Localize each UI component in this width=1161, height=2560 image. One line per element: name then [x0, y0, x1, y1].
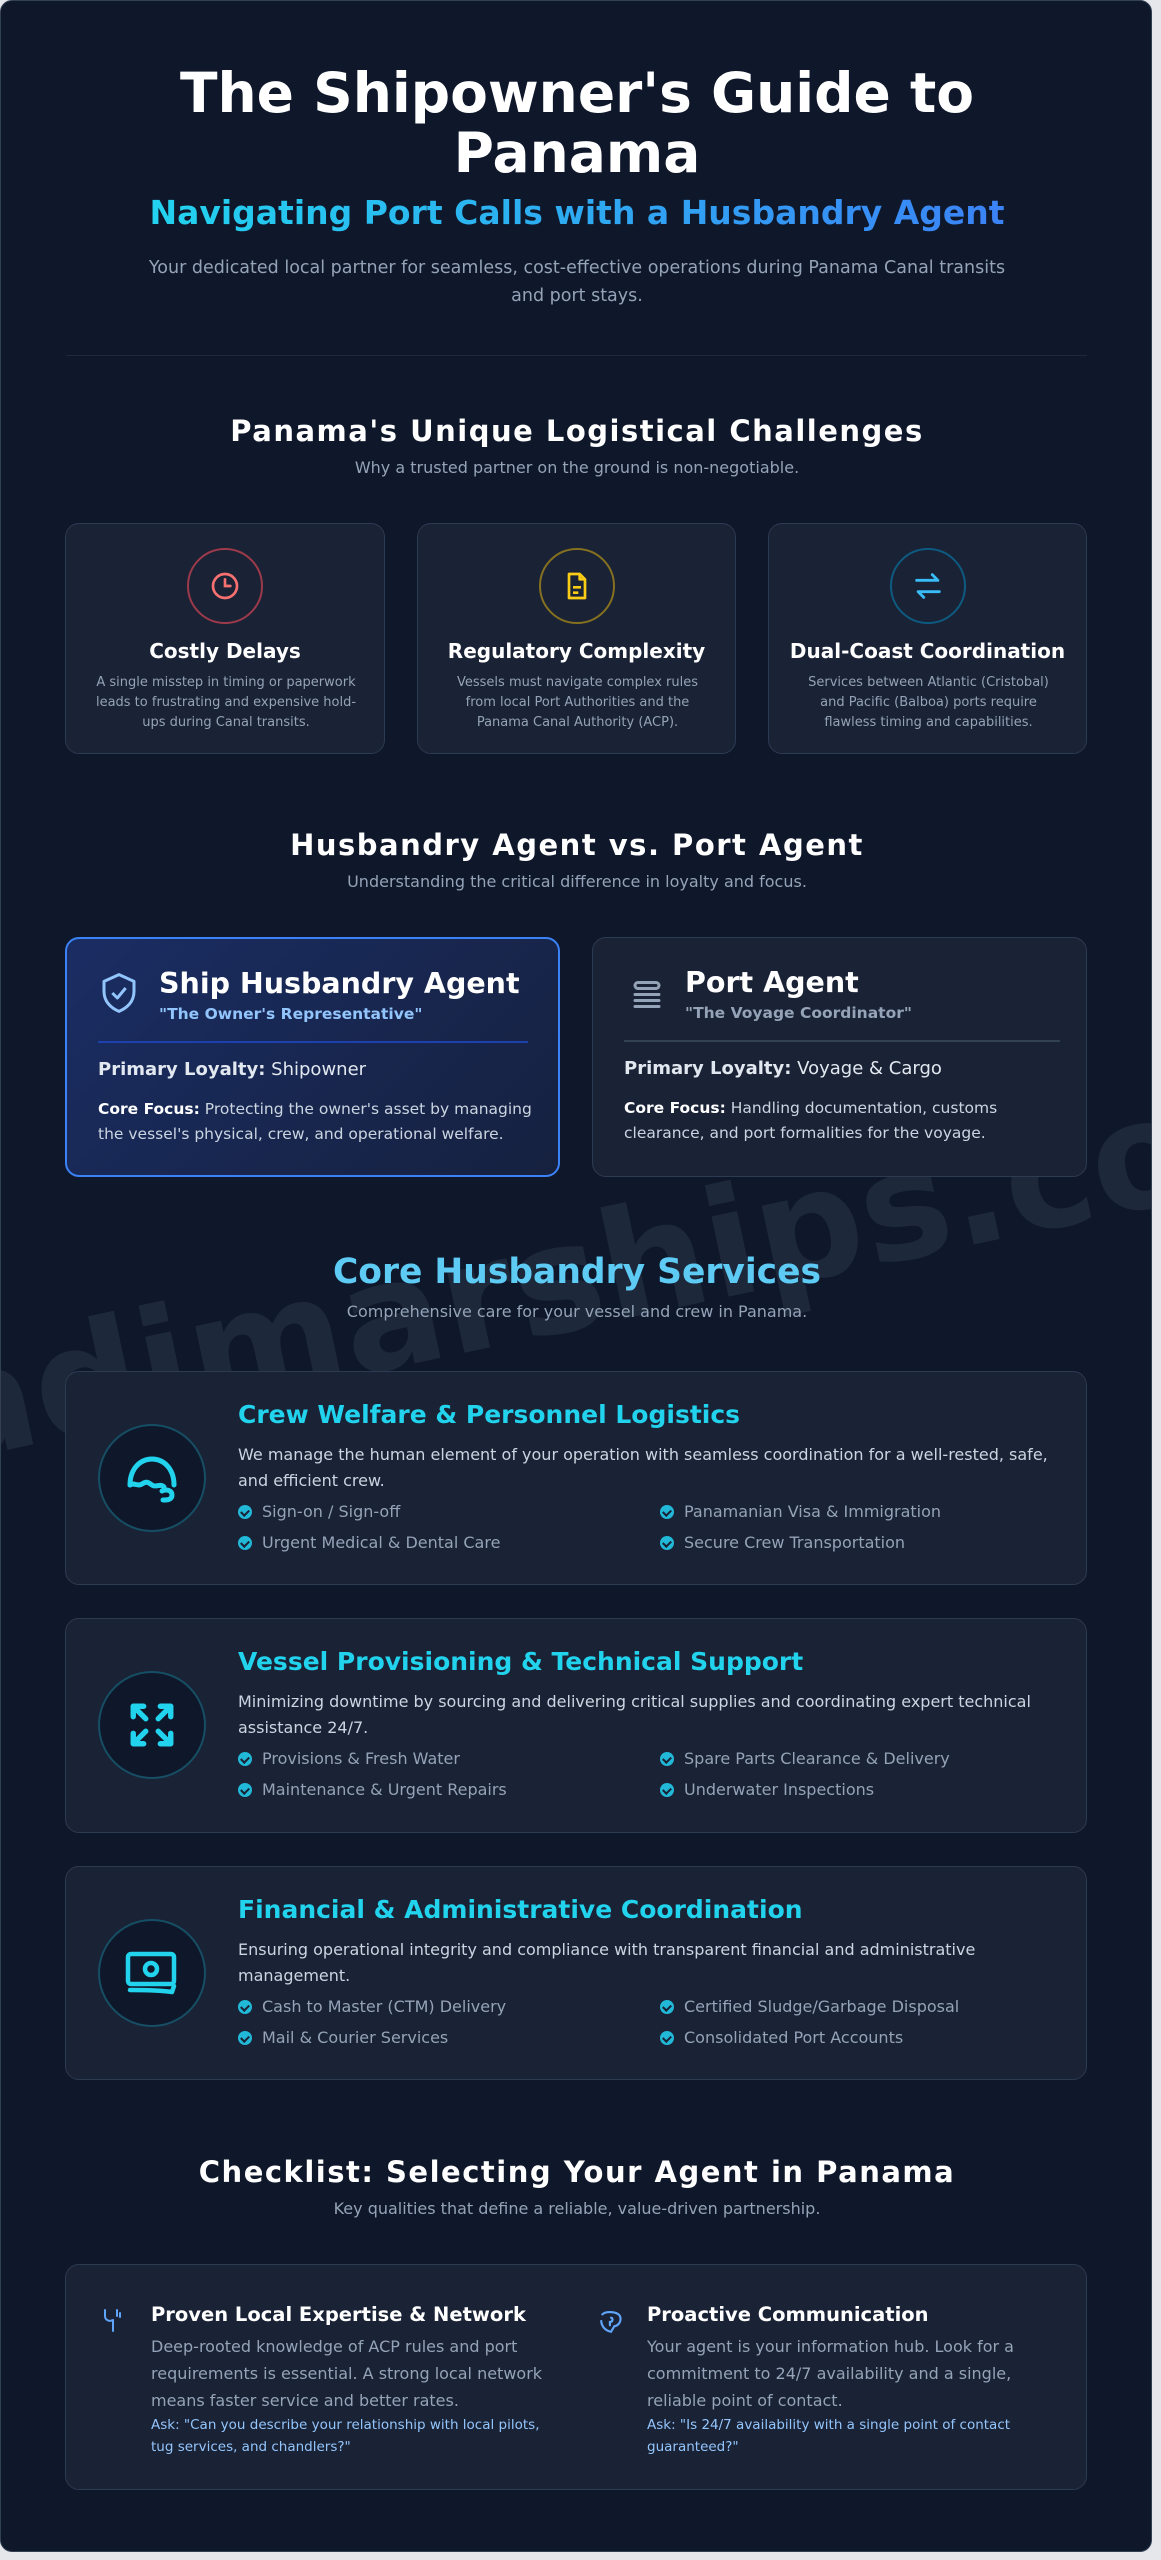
panel: costly delays: A single misstep in timing or paperwork leads to frustrating and expensive hold-ups during Canal transits.	[96, 675, 356, 730]
section heading: checklist	[199, 2155, 955, 2218]
title: The Shipowner's Guide to	[180, 61, 974, 125]
panel: port agent: Core Focus: Handling documentation, customs clearance, and port formalities for the voyage.	[624, 1099, 997, 1142]
panel: ship husbandry agent: Primary Loyalty: Shipowner	[98, 1059, 366, 1080]
panel: crew welfare: Crew Welfare & Personnel Logistics	[238, 1400, 740, 1429]
panel: vessel provisioning: Maintenance & Urgent Repairs	[262, 1780, 507, 1799]
item: local expertise	[104, 2303, 542, 2455]
panel: vessel provisioning: Underwater Inspections	[684, 1780, 874, 1799]
icon: chat	[600, 2311, 622, 2333]
panel: regulatory complexity: Regulatory Complexity	[448, 639, 705, 663]
panel: dual-coast	[768, 523, 1087, 754]
icon: arrows	[890, 548, 966, 624]
panel: regulatory complexity	[417, 523, 736, 754]
icon: stack	[634, 981, 660, 1008]
item: proactive communication	[600, 2303, 1014, 2455]
panel: crew welfare: Panamanian Visa & Immigration	[684, 1502, 941, 1521]
panel: crew welfare: Sign-on / Sign-off	[262, 1502, 400, 1521]
panel: financial: Certified Sludge/Garbage Disposal	[684, 1997, 959, 2016]
intro text: Your dedicated local partner for seamless, cost-effective operations during Panama Canal transits and port stays.	[149, 258, 1005, 306]
panel: ship husbandry agent	[65, 937, 560, 1177]
panel: ship husbandry agent: Ship Husbandry Agent	[159, 967, 520, 1000]
panel: port agent: "The Voyage Coordinator"	[685, 1004, 912, 1022]
panel: regulatory complexity: Vessels must navigate complex rules from local Port Authorities and the Panama Canal Authority (ACP).	[457, 675, 698, 730]
item: proactive communication: Your agent is your information hub. Look for a commitment to 24/7 availability and a single, reliable point of contact.	[647, 2337, 1014, 2410]
panel: financial: Cash to Master (CTM) Delivery	[262, 1997, 506, 2016]
panel: dual-coast: Dual-Coast Coordination	[790, 639, 1065, 663]
icon: shield	[102, 973, 136, 1013]
icon: stethoscope-like	[104, 2309, 121, 2332]
icon: cash	[98, 1919, 206, 2027]
section heading: core services: Core Husbandry Services	[333, 1252, 821, 1292]
panel: financial: Ensuring operational integrity and compliance with transparent financial and administrative management.	[238, 1940, 975, 1985]
panel: port agent	[592, 937, 1087, 1177]
panel: crew welfare	[65, 1371, 1087, 1585]
section heading: agent vs	[290, 828, 864, 891]
item: proactive communication: Ask: "Is 24/7 availability with a single point of contact guaranteed?"	[647, 2417, 1010, 2455]
section heading: challenges: Panama's Unique Logistical Challenges	[230, 414, 924, 448]
panel: costly delays	[65, 523, 385, 754]
section heading: challenges: Why a trusted partner on the ground is non-negotiable.	[355, 458, 799, 477]
icon: expand arrows	[98, 1671, 206, 1779]
panel: crew welfare: Secure Crew Transportation	[684, 1533, 905, 1552]
panel: ship husbandry agent: "The Owner's Representative"	[159, 1005, 422, 1023]
panel: financial: Mail & Courier Services	[262, 2028, 448, 2047]
panel: port agent: Primary Loyalty: Voyage & Cargo	[624, 1058, 942, 1079]
section heading: agent vs: Understanding the critical difference in loyalty and focus.	[347, 872, 807, 891]
panel: costly delays: Costly Delays	[149, 639, 301, 663]
section heading: core services	[333, 1252, 821, 1321]
item: proactive communication: Proactive Communication	[647, 2303, 929, 2326]
panel: vessel provisioning: Minimizing downtime by sourcing and delivering critical supplies and coordinating expert technical assistance 24/7.	[238, 1692, 1031, 1737]
panel: dual-coast: Services between Atlantic (Cristobal) and Pacific (Balboa) ports require flawless timing and capabilities.	[808, 675, 1049, 730]
subtitle: Navigating Port Calls with a Husbandry Agent	[149, 193, 1005, 232]
section heading: core services: Comprehensive care for your vessel and crew in Panama.	[347, 1302, 807, 1321]
panel: ship husbandry agent: Core Focus: Protecting the owner's asset by managing the vessel's physical, crew, and operational welfare.	[98, 1100, 532, 1143]
title	[180, 61, 974, 185]
title: Panama	[454, 121, 700, 185]
panel: vessel provisioning: Provisions & Fresh Water	[262, 1749, 460, 1768]
section heading: challenges	[230, 414, 924, 477]
panel: financial	[65, 1866, 1087, 2080]
item: local expertise: Proven Local Expertise & Network	[151, 2303, 526, 2326]
section heading: checklist: Key qualities that define a reliable, value-driven partnership.	[334, 2199, 820, 2218]
panel: vessel provisioning	[65, 1618, 1087, 1833]
panel: vessel provisioning: Vessel Provisioning & Technical Support	[238, 1647, 803, 1676]
item: local expertise: Deep-rooted knowledge of ACP rules and port requirements is essential. A strong local network means faster service and better rates.	[151, 2337, 542, 2410]
panel: checklist	[65, 2264, 1087, 2490]
section heading: checklist: Checklist: Selecting Your Agent in Panama	[199, 2155, 955, 2189]
icon: crew	[98, 1424, 206, 1532]
section heading: agent vs: Husbandry Agent vs. Port Agent	[290, 828, 864, 862]
panel: financial: Consolidated Port Accounts	[684, 2028, 903, 2047]
panel: port agent: Port Agent	[685, 966, 859, 999]
panel: crew welfare: Urgent Medical & Dental Care	[262, 1533, 500, 1552]
item: local expertise: Ask: "Can you describe your relationship with local pilots, tug services, and chandlers?"	[151, 2417, 540, 2455]
panel: crew welfare: We manage the human element of your operation with seamless coordination for a well-rested, safe, and efficient crew.	[238, 1445, 1048, 1490]
panel: financial: Financial & Administrative Coordination	[238, 1895, 803, 1924]
icon: clock	[187, 548, 263, 624]
panel: vessel provisioning: Spare Parts Clearance & Delivery	[684, 1749, 950, 1768]
icon: document	[538, 548, 614, 624]
